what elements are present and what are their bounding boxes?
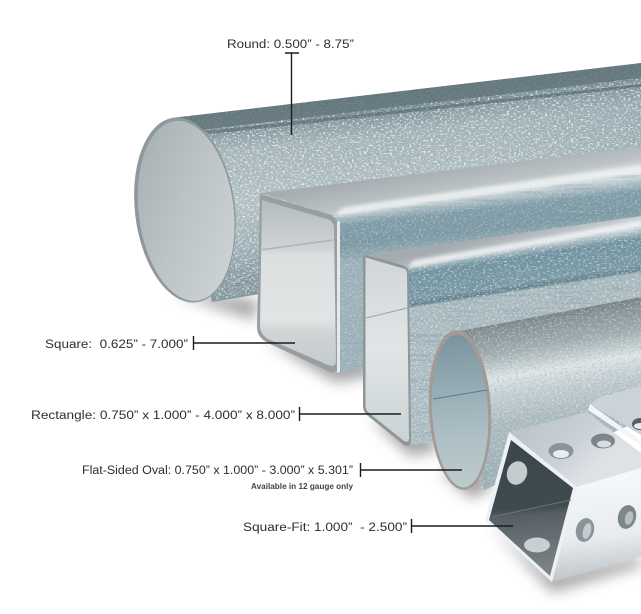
- label: rectangle: [31, 407, 401, 422]
- tube: round: [124, 60, 641, 308]
- label: round: Round: 0.500” - 8.75”: [227, 39, 354, 51]
- note: gauge availability: Available in 12 gauge only: [251, 481, 353, 491]
- tube: square-fit rear post: [588, 386, 641, 445]
- square-fit holes: [503, 434, 639, 552]
- label: square-fit: Square-Fit: 1.000” - 2.500”: [243, 522, 407, 534]
- square tube opening: [257, 194, 339, 372]
- square-fit top face: [509, 412, 641, 487]
- oval tube outer body: [455, 297, 641, 490]
- label: square: [45, 336, 295, 351]
- tube: square-fit front post: [485, 412, 641, 582]
- label: flat-sided oval: [82, 463, 462, 491]
- square tube top face: [260, 147, 641, 216]
- label: round: [227, 39, 354, 135]
- cast shadows beneath the tubes: [170, 292, 641, 592]
- round tube outer body: [172, 63, 641, 302]
- label: square: Square: 0.625” - 7.000”: [45, 339, 188, 351]
- rectangle tube top face: [364, 216, 641, 268]
- label: flat-sided oval: Flat-Sided Oval: 0.750” x 1.000” - 3.000” x 5.301”: [82, 465, 353, 477]
- square tube side face: [335, 170, 641, 373]
- label: square-fit: [243, 519, 513, 534]
- oval tube opening: [425, 328, 495, 492]
- square-fit side face: [552, 468, 641, 582]
- rectangle tube opening: [363, 255, 411, 446]
- round tube opening: [124, 112, 246, 308]
- label: rectangle: Rectangle: 0.750” x 1.000” - 4.000” x 8.000”: [31, 410, 295, 422]
- tube: flat-sided oval: [425, 295, 641, 492]
- rectangle tube side face: [408, 225, 641, 446]
- square-fit opening: [485, 432, 577, 582]
- tube: square: [257, 147, 641, 375]
- tube: rectangle: [363, 216, 641, 448]
